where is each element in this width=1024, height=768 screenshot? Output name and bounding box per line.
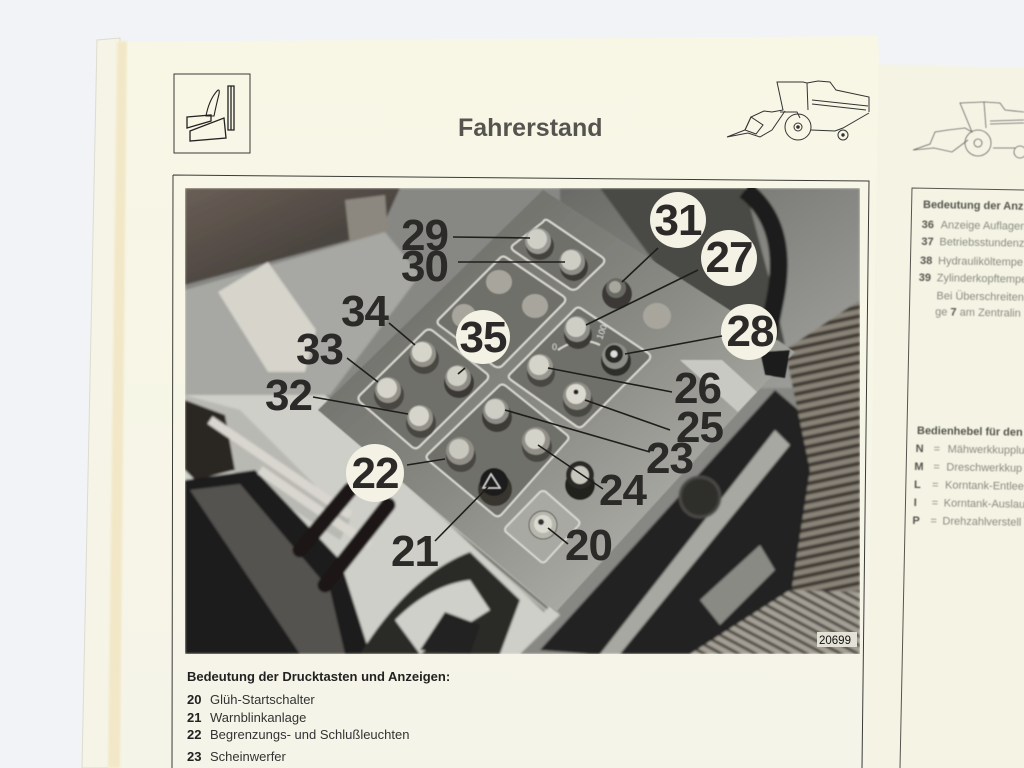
text block: Bedeutung der Anzeigen: 38 <box>920 255 932 267</box>
number labels: 22 <box>352 449 398 498</box>
starter key switch <box>529 511 557 539</box>
title: Fahrerstand <box>458 114 602 142</box>
callout circles <box>346 192 777 502</box>
legend: Drucktasten und Anzeigen <box>187 669 450 764</box>
button group 25 26 27 28 <box>509 308 650 427</box>
text block: Bedienhebel: Korntank-Entlee <box>945 479 1024 493</box>
text block: Bedienhebel: L <box>914 479 921 491</box>
control plate <box>318 190 795 612</box>
text block: Bedienhebel: = <box>932 497 938 509</box>
button group 32 33 34 <box>358 330 488 448</box>
text block: Bedeutung der Anzeigen: Bei Überschreiten <box>936 290 1024 304</box>
number labels: 23 <box>646 434 693 483</box>
panel frame, right page <box>900 188 1024 768</box>
number labels: 31 <box>655 196 702 245</box>
number labels: 24 <box>599 466 647 515</box>
legend: Drucktasten und Anzeigen: Glüh-Startschalter <box>210 692 315 707</box>
leader lines <box>313 237 722 544</box>
icon: combine harvester <box>727 81 869 140</box>
button group 21 22 23 24 <box>426 384 568 516</box>
photo number tag <box>817 632 857 647</box>
text block: Bedienhebel <box>912 425 1024 529</box>
legend: Drucktasten und Anzeigen: Bedeutung der Drucktasten und Anzeigen: <box>187 669 450 684</box>
legend: Drucktasten und Anzeigen: 22 <box>187 727 201 742</box>
text block: Bedienhebel: = <box>930 515 937 527</box>
text block: Bedeutung der Anzeigen: 37 <box>921 236 934 248</box>
number labels: 34 <box>341 287 389 336</box>
legend: Drucktasten und Anzeigen: Warnblinkanlage <box>210 710 306 725</box>
text block: Bedienhebel: M <box>914 461 924 473</box>
buttons <box>374 228 632 539</box>
legend: Drucktasten und Anzeigen: 21 <box>187 710 201 725</box>
icon box: driver seat <box>174 74 250 153</box>
photo number tag: 20699 <box>819 635 851 647</box>
icon: combine harvester, right page <box>913 102 1024 158</box>
text block: Bedeutung der Anzeigen <box>918 199 1024 320</box>
hazard button <box>478 468 512 506</box>
number labels: 28 <box>727 307 774 356</box>
number labels: 33 <box>296 325 343 374</box>
main page <box>108 36 879 768</box>
text block: Bedienhebel: Dreschwerkkup <box>946 462 1022 475</box>
text block: Bedeutung der Anzeigen: 36 <box>922 219 934 231</box>
back page edge <box>82 38 120 768</box>
gauge arc <box>558 341 600 350</box>
legend: Drucktasten und Anzeigen: Scheinwerfer <box>210 749 287 764</box>
text block: Bedeutung der Anzeigen: Anzeige Auflagen <box>941 219 1024 233</box>
text block: Bedienhebel: P <box>912 515 920 527</box>
display group 35 <box>438 256 565 367</box>
warning lamp <box>565 461 595 500</box>
text block: Bedienhebel: N <box>916 443 924 455</box>
number labels: 32 <box>265 371 312 420</box>
legend: Drucktasten und Anzeigen: 20 <box>187 692 201 707</box>
text block: Bedienhebel: Bedienhebel für den <box>917 425 1023 439</box>
number labels: 20 <box>565 521 612 570</box>
button group 20 <box>505 491 580 562</box>
text block: Bedeutung der Anzeigen: Betriebsstundenz <box>939 236 1024 250</box>
text block: Bedienhebel: Drehzahlverstell <box>942 515 1021 529</box>
text block: Bedienhebel: Korntank-Auslau <box>944 497 1024 511</box>
text block: Bedienhebel: = <box>934 443 940 455</box>
text block: Bedeutung der Anzeigen: 39 <box>919 272 931 284</box>
photo background <box>185 188 860 654</box>
text block: Bedeutung der Anzeigen: ge 7 am Zentralin <box>935 306 1021 320</box>
button group 29 30 <box>512 220 604 290</box>
number labels <box>265 196 774 576</box>
number labels: 35 <box>460 313 507 362</box>
photo: operator console <box>185 188 860 654</box>
legend: Drucktasten und Anzeigen: 23 <box>187 749 201 764</box>
main panel frame <box>172 175 869 768</box>
text block: Bedeutung der Anzeigen: Hydrauliköltempe <box>938 255 1023 269</box>
indicator lamps <box>452 270 671 329</box>
number labels: 29 <box>401 211 448 260</box>
control plate: 0 <box>552 342 557 352</box>
text block: Bedienhebel: = <box>933 461 940 473</box>
number labels: 30 <box>401 242 448 291</box>
number labels: 26 <box>674 364 721 413</box>
text block: Bedeutung der Anzeigen: Bedeutung der Anz <box>923 199 1024 213</box>
text block: Bedienhebel: = <box>932 479 939 491</box>
number labels: 27 <box>706 233 752 282</box>
legend: Drucktasten und Anzeigen: Begrenzungs- und Schlußleuchten <box>210 727 409 742</box>
number labels: 25 <box>676 403 723 452</box>
control plate: 100 <box>594 323 609 341</box>
number labels: 21 <box>391 527 438 576</box>
right page <box>860 64 1024 768</box>
text block: Bedienhebel: I <box>914 497 917 509</box>
text block: Bedienhebel: Mähwerkkupplu <box>948 444 1024 457</box>
